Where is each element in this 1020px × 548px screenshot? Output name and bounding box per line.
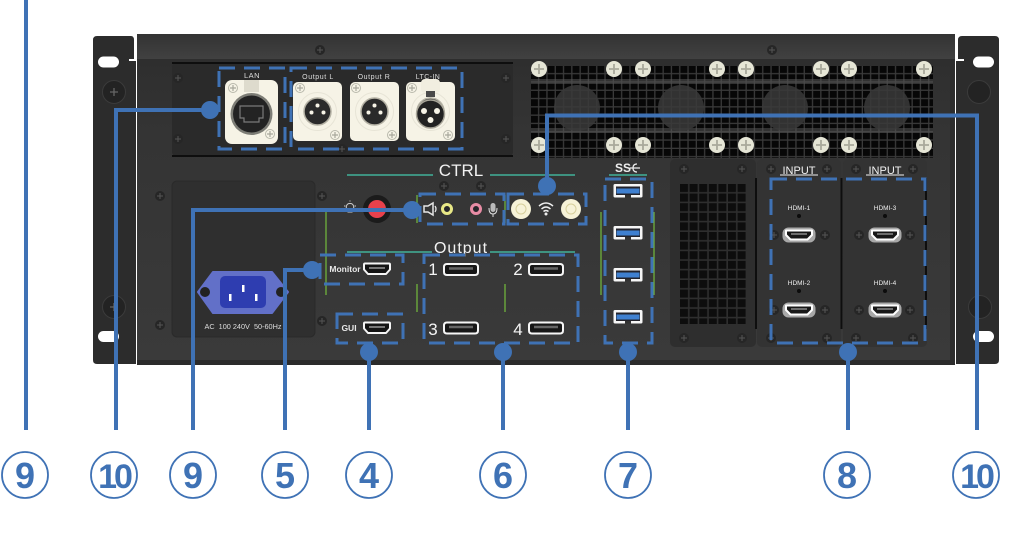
LTC-IN connector (406, 74, 455, 141)
panel: HDMI input card 2: HDMI-4 (874, 280, 897, 287)
green guide lines (326, 195, 654, 312)
Output ports 1-4 (428, 260, 563, 339)
Output ports 1-4: 1 (428, 260, 438, 279)
panel: HDMI input card 1: HDMI-1 (788, 205, 811, 212)
Monitor port (329, 264, 390, 274)
panel: HDMI input card 2: HDMI-3 (874, 205, 897, 212)
text: 10 (960, 458, 994, 496)
panel: HDMI input card 1: HDMI-2 (788, 280, 811, 287)
icon: AC power socket (198, 272, 288, 313)
power rating text: AC 100 240V 50-60Hz (204, 322, 282, 331)
Output L connector: Output L (302, 74, 334, 81)
Output ports 1-4: 2 (513, 260, 523, 279)
USB 3 ports (609, 161, 647, 324)
USB 3 ports: SS (615, 161, 631, 175)
power button with indicator (344, 195, 391, 223)
Output L connector (293, 74, 342, 141)
heading: CTRL: CTRL (439, 161, 483, 180)
text: 8 (837, 455, 857, 496)
panel: HDMI input card 1: INPUT (782, 165, 816, 177)
text: 7 (618, 455, 638, 496)
LAN connector: LAN (244, 71, 260, 80)
text: 6 (493, 455, 513, 496)
text: 5 (275, 455, 295, 496)
text: 9 (15, 455, 35, 496)
text: 4 (359, 455, 379, 496)
numbered callouts (2, 452, 999, 498)
GUI port: GUI (341, 323, 357, 333)
LTC-IN connector: LTC-IN (416, 74, 440, 81)
Monitor port: Monitor (329, 264, 361, 274)
panel: audio and network connector plate (172, 63, 513, 156)
fan grille (531, 61, 933, 158)
leader lines with anchor dots (26, 0, 977, 430)
wifi antenna connectors (511, 199, 581, 219)
rack ear: left (93, 36, 136, 364)
Output R connector: Output R (358, 74, 390, 81)
rack ear: right (956, 36, 999, 364)
heading: Output: Output (434, 240, 488, 257)
text: 9 (183, 455, 203, 496)
LAN connector (225, 71, 278, 144)
GUI port (341, 322, 390, 333)
device chassis (137, 34, 955, 365)
Output ports 1-4: 3 (428, 320, 438, 339)
panel: HDMI input card 2 (843, 159, 927, 347)
panel: power inlet (172, 181, 315, 337)
panel: HDMI input card 2: INPUT (868, 165, 902, 177)
panel: HDMI input card 1 (756, 159, 842, 347)
audio jacks (424, 203, 497, 217)
Output R connector (350, 74, 399, 141)
Output ports 1-4: 4 (513, 320, 523, 339)
text: 10 (98, 458, 132, 496)
dashed highlight boxes (219, 68, 925, 343)
ventilation panel (670, 159, 756, 347)
